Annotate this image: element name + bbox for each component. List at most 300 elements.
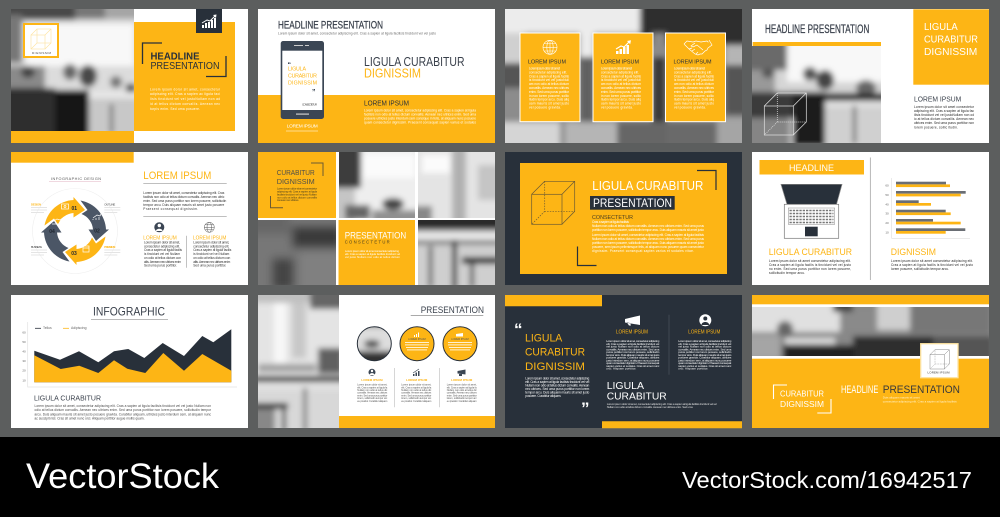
title: LIGULA CURABITUR	[592, 179, 703, 193]
logo box with cube	[921, 344, 958, 378]
column 1: on odio at tellus dictum con	[144, 256, 181, 260]
panel: slide 9 area chart	[11, 295, 248, 428]
panel: slide 8 laptop and bar chart	[752, 152, 989, 285]
corner brackets	[578, 170, 716, 266]
icon: wireframe cube	[532, 181, 575, 224]
column 2: elit. Cras a sapien at ligula fa	[401, 386, 432, 389]
circle: yellow 2	[443, 327, 477, 361]
axis labels	[22, 330, 26, 382]
icon: person	[154, 222, 164, 232]
axis labels: 60	[22, 330, 26, 334]
column 2: LOREM IPSUM	[688, 330, 720, 336]
step numbers: 02	[94, 228, 100, 234]
body text	[914, 105, 975, 129]
column 2: lorem, sollicitudin tempor arc	[401, 397, 432, 400]
presentation label: PRESENTATION	[593, 198, 672, 210]
body text: posuere, sem ipsum pellentesque felis, at aliquam nunc posuere quam consectetur	[592, 245, 705, 249]
bar chart: 20	[885, 221, 889, 225]
column 3: lorem, sollicitudin tempor arc	[447, 397, 477, 400]
icon: smartphone with quote: “	[288, 62, 291, 69]
column 2: LOREM IPSUM	[193, 235, 227, 241]
column 1: eu pretolor. Curabitur aliquam	[357, 400, 387, 403]
heading: LOREM IPSUM	[143, 170, 211, 182]
yellow content area	[520, 163, 727, 274]
card 3	[666, 33, 726, 122]
card 2: Lorem ipsum dolor sit amet	[601, 66, 632, 70]
column 2	[401, 369, 432, 403]
icon: laptop	[781, 184, 842, 238]
icon: wireframe cube	[764, 93, 806, 135]
card 2: am non odio at tellus dictum	[601, 82, 641, 86]
dark area	[34, 329, 231, 382]
yellow bands	[505, 295, 742, 428]
card 1: uam mauris sit amet justo	[529, 102, 569, 106]
left caption: Cras a sapien at ligula facilis is tincidunt vel vel justo	[769, 263, 851, 267]
body text: Lorem ipsum dolor sit amet, consectetur adipiscing elit. Cras	[143, 191, 225, 195]
body text: facilisis non odio at tellus dictum convallis. Aenean nec ultrices enim. Sed uma	[364, 112, 476, 116]
icon: globe	[204, 222, 214, 232]
column 1: is tincidunt vel vel Nullam	[144, 252, 180, 256]
body text	[883, 396, 957, 404]
card 1: consectetur adipiscing elit.	[529, 70, 567, 74]
column 2: Lorem ipsum dolor sit amet,	[401, 384, 432, 386]
column 2: on odio at tellus dictum con	[193, 256, 231, 260]
column 2: eu pretolor. Curabitur aliquam	[401, 400, 431, 403]
body text: quam consectetur dignissim. Praesent consequat sapien varius et sodales	[364, 120, 476, 124]
left caption: no enim. Sed uma purus porttitor non lorem posuere,	[769, 267, 851, 271]
column 1: justo interdum sem, at aliquam nunc posuere	[605, 358, 660, 362]
photo: blurred corridor	[505, 9, 742, 143]
body text: Cras a sapien at ligula facilisis	[592, 220, 629, 224]
quote title: LIGULA	[525, 332, 563, 344]
column 3: Nullam non odio at tellus dic	[447, 389, 477, 392]
body text: Lorem ipsum dolor sit amet, consectetur adipiscing elit. Cras a sapien at ligula facilisis	[592, 233, 704, 237]
column 1: orci. Aliquam porttitor.	[606, 366, 636, 370]
icon: smartphone with quote: CURABITUR	[288, 74, 317, 80]
column 1: elit. Cras a sapien at ligula fa	[357, 386, 388, 389]
label: DIGNISSIM	[780, 400, 824, 409]
body text	[364, 108, 476, 124]
column 1: Lorem ipsum dolor sit amet,	[357, 384, 388, 386]
column 1: consectetur adipiscing elit.	[144, 244, 180, 248]
subline: Lorem ipsum dolor sit amet, consectetur adipiscing elit. Cras a sapien at ligula facilisis tincidunt vel vel justo	[278, 32, 436, 36]
label	[780, 390, 824, 409]
panel: slide 7 dark frame with cube	[505, 152, 742, 285]
column 1: allis. Aenean nec ultrices enim	[144, 260, 181, 264]
icon: smartphone with quote: CONSECTETUR	[302, 102, 317, 106]
title: DIGNISSIM	[924, 47, 977, 58]
panel: slide 10 photo with circles	[258, 295, 495, 428]
bar chart: 10	[885, 230, 889, 234]
body text: ac suscipit nisl. Cras sit amet nunc orci. Aliquam porttitor augue mollis quam.	[34, 416, 145, 420]
bar chart: 30	[885, 212, 889, 216]
column 1: tempor arcu. Duis aliquam mauris sit amet justo	[606, 353, 660, 357]
body text: io at tellus dictum convallis. Aenean nec	[914, 117, 974, 121]
side label lines	[31, 207, 120, 256]
icon: smartphone with quote: ”	[312, 89, 316, 96]
card 3: am non odio at tellus dictum	[674, 82, 714, 86]
area chart	[22, 322, 237, 387]
column 1: quam consectetur dignissim. Praesent consequat	[606, 361, 659, 365]
card 1: is tincidunt vel vel justoNull	[529, 78, 569, 82]
column 1: Lorem ipsum dolor sit amet, consectetur adipiscing	[606, 339, 660, 343]
headline bar	[760, 160, 864, 174]
body text: Lorem ipsum dolor sit amet consectetur	[914, 105, 975, 109]
column 1	[605, 330, 660, 370]
column 3	[447, 370, 477, 403]
column 2: Lorem ipsum dolor sit amet,	[193, 240, 229, 244]
body text	[150, 88, 221, 111]
body text: Lorem ipsum dolor sit amet, consectetur adipiscing elit. Cras a sapien at ligula facilisis tincidunt vel vel justo Nullam non	[34, 404, 211, 408]
photo tile bottom right	[418, 220, 495, 285]
card 1: in non lorem posuere, sollic	[529, 94, 569, 98]
column 2: posuere gravida. Curabitur aliquam, ultricies	[678, 356, 732, 360]
card 2: enim. Sed uma purus porttitor	[601, 90, 642, 94]
body text: ultrices enim. Sed uma purus porttitor non	[914, 121, 974, 125]
tile body: adipiscing elit. Cras a sapien at ligula	[277, 190, 317, 194]
yellow word: DIGNISSIM	[364, 66, 421, 81]
body text: turpis enim. Sed uma posuere.	[150, 107, 200, 111]
card 2: convallis. Aenean nec ultrices	[601, 86, 641, 90]
card 2: is tincidunt vel vel justoNull	[601, 78, 641, 82]
card 2: LOREM IPSUM	[601, 59, 639, 65]
card 2: in non lorem posuere, sollic	[601, 94, 641, 98]
column 2: consectetur adipiscing elit.	[193, 244, 229, 248]
body text: Lorem ipsum dolor sit amet, consectetur adipiscing elit. Cras a sapien at ligula	[364, 108, 476, 112]
lower title	[607, 380, 667, 403]
card 1: itudin tempor arcu. Duis aliq	[529, 98, 569, 102]
quote body: tempor arcu. Duis aliquam mauris sit amet justo	[525, 390, 590, 394]
brand name: VectorStock	[26, 457, 220, 496]
quote body: elit. Cras a sapien at ligula facilisis tincidunt vel vel	[525, 380, 590, 384]
column 2: tempor arcu. Duis aliquam mauris sit amet justo	[678, 353, 732, 357]
bar chart: 50	[885, 193, 889, 197]
axis labels: 40	[22, 349, 26, 353]
card 3: consectetur adipiscing elit.	[674, 70, 712, 74]
tile sub heading: CONSECTETUR	[345, 240, 390, 245]
card 3: vel posuere gravida.	[674, 106, 706, 110]
left caption	[769, 247, 852, 275]
icon: growth bars	[616, 40, 631, 54]
left caption: LIGULA CURABITUR	[769, 247, 852, 258]
body text: enim. Sed uma purus porttitor non lorem posuere, sollicitudin	[143, 199, 227, 203]
column 1	[357, 369, 388, 403]
photo tile top middle	[339, 152, 415, 218]
heading: INFOGRAPHIC	[93, 304, 165, 318]
headline: HEADLINE	[841, 384, 878, 396]
yellow title box	[913, 9, 989, 85]
step numbers: 04	[49, 229, 55, 235]
tile body	[345, 249, 401, 259]
divider	[668, 315, 670, 375]
lower body: Lorem ipsum dolor sit amet, consectetur adipiscing elit. Cras a sapien at ligula facilisis tincidunt vel vel	[607, 402, 717, 406]
card 2: uam mauris sit amet justo	[601, 102, 641, 106]
heading: PRESENTATION	[150, 61, 220, 72]
white photo band	[752, 304, 989, 359]
photo: blurred window	[258, 295, 339, 428]
yellow tile top-left	[258, 152, 336, 218]
phone caption: LOREM IPSUM	[287, 124, 318, 130]
label: CURABITUR	[780, 390, 824, 399]
column 2: Cras a sapien at ligula facilis	[193, 248, 232, 252]
bar chart	[885, 178, 970, 238]
column 1: purus porttitor non lorem posuere, sollicitudin	[606, 350, 660, 354]
right caption: Lorem ipsum dolor sit amet consectetur adipiscing elit.	[891, 259, 973, 263]
sub heading: LOREM IPSUM	[914, 97, 961, 104]
card 1: convallis. Aenean nec ultrices	[529, 86, 569, 90]
axis labels: 50	[22, 340, 26, 344]
card 1: Lorem ipsum dolor sit amet	[529, 66, 560, 70]
heading: HEADLINE PRESENTATION	[765, 24, 869, 36]
yellow strip	[753, 42, 881, 46]
diagram title: INFOGRAPHIC DESIGN	[51, 177, 101, 181]
yellow area	[34, 353, 231, 382]
column 1: LOREM IPSUM	[143, 235, 177, 241]
panel: slide 2 phone quote	[258, 9, 495, 143]
side labels: PREMIUM	[104, 245, 116, 249]
arrow 03	[65, 236, 106, 265]
card 1: Cras a sapien at ligula facilis	[529, 74, 569, 78]
column 1: Nullam non odio at tellus dic	[357, 389, 388, 392]
label brackets	[774, 385, 831, 413]
card 3: uam mauris sit amet justo	[674, 102, 714, 106]
card 2: itudin tempor arcu. Duis aliq	[601, 98, 641, 102]
headline: LIGULA CURABITUR	[364, 54, 464, 69]
card 1: enim. Sed uma purus porttitor	[529, 90, 570, 94]
quote body: Lorem ipsum dolor sit amet, consectetur adipiscing	[525, 376, 590, 380]
heading: PRESENTATION	[421, 305, 484, 315]
body text: posuere ultricies justo interdum sem sonsique in felis, at aliquam nunc posuere	[364, 116, 476, 120]
column 3: enim. Sed uma purus porttitor	[447, 394, 477, 397]
headline bar: HEADLINE	[789, 163, 834, 173]
card 1: LOREM IPSUM	[528, 59, 566, 65]
column 1: LOREM IPSUM	[361, 378, 383, 382]
quote body: posuere. Curabitur aliquam.	[525, 394, 561, 398]
tile body: non odio at tellus dictum convallis	[277, 196, 318, 200]
title: CURABITUR	[924, 34, 978, 45]
left caption: sollicitudin tempor arcu.	[769, 271, 805, 275]
circle: yellow 1	[400, 327, 434, 361]
card 3: Lorem ipsum dolor sit amet	[674, 66, 705, 70]
body text: facilisis non odio at tellus dictum convallis. Aenean nec ultric	[143, 195, 225, 199]
body text: porttitor non lorem posuere, sollicitudin tempor arcu. Duis aliquam mauris sit amet justo	[592, 228, 704, 232]
photo: blurred strip	[752, 307, 989, 356]
logo box with cube	[24, 24, 58, 57]
card 3: Cras a sapien at ligula facilis	[674, 74, 714, 78]
body text: Lorem ipsum dolor sit amet, consectetur	[150, 88, 221, 92]
right caption: DIGNISSIM	[891, 247, 936, 258]
step glyphs	[52, 204, 102, 252]
body text: adipiscing elit. Cras a sapien ac ligula faci	[150, 92, 220, 96]
axis labels: 30	[22, 359, 26, 363]
column 2: orci. Aliquam porttitor.	[678, 366, 708, 370]
card 3: itudin tempor arcu. Duis aliq	[674, 98, 714, 102]
column 2: sapien varius et sodales. Cras sit amet nunc	[678, 364, 732, 368]
body text: porttitor non lorem posuere, sollicitudin tempor arcu. Duis aliquam mauris sit amet justo	[592, 241, 704, 245]
right caption: lorem posuere, sollicitudin tempor arcu.	[891, 267, 949, 271]
panel: slide 1 headline presentation	[11, 9, 248, 143]
divider	[869, 158, 871, 280]
column 1: vel justo Nullam non odio at tellus dictum	[606, 345, 660, 349]
column 1: elit. Cras a sapien at ligula facilisis tincidunt vel	[606, 342, 660, 346]
yellow content box	[134, 22, 235, 131]
card 1: vel posuere gravida.	[529, 106, 561, 110]
logo box with cube: DIGNISSIM	[32, 51, 52, 55]
body text: consectetur adipiscing elit. Cras a sapien at ligula facilisis	[883, 400, 957, 404]
logo box with cube: LOREM IPSUM	[928, 370, 950, 374]
title	[924, 22, 978, 58]
icon: smartphone with quote: DIGNISSIM	[288, 80, 317, 86]
heading: HEADLINE PRESENTATION	[278, 20, 383, 32]
cycle diagram	[32, 188, 118, 274]
column 2: allis. Aenean nec ultrices enim	[193, 260, 231, 264]
sub heading: LOREM IPSUM	[364, 100, 409, 107]
step numbers: 01	[72, 206, 77, 212]
body text	[592, 220, 705, 253]
yellow lower band	[258, 95, 495, 143]
divider	[185, 236, 187, 268]
footer bar	[0, 437, 1000, 517]
body text: ilisis tincidunt vel vel justoNullam non od	[914, 113, 974, 117]
column 1: LOREM IPSUM	[616, 330, 648, 336]
body text: odio at tellus dictum convallis. Aenean nec ultrices enim. Sed uma purus porttitor non lorem posuere, sollicitudin tempor	[34, 408, 212, 412]
arrow 01	[44, 197, 85, 226]
image reference: VectorStock.com/16942517	[682, 467, 972, 493]
bar chart: 40	[885, 202, 889, 206]
icon: person	[699, 314, 711, 326]
column 2: convallis. Aenean nec ultrices	[401, 392, 432, 395]
icon: growth chart	[196, 9, 222, 33]
tile body: facilisis tincidunt vel vel justo Nullam	[277, 192, 318, 196]
quote body: nec ultrices. Sed uma purus porttitor non lorem	[525, 387, 590, 391]
column 2: Nullam non odio at tellus dic	[401, 389, 432, 392]
column 1	[143, 235, 182, 268]
body text: adipiscing elit. Cras a sapien at ligula fac	[914, 109, 974, 113]
column 2: Lorem ipsum dolor sit amet, consectetur adipiscing	[678, 339, 732, 343]
arrow 02	[80, 200, 109, 241]
column 3: elit. Cras a sapien at ligula fa	[447, 386, 477, 389]
panel: slide 6 photo grid	[258, 152, 495, 285]
column 1: Sed uma purus porttitor.	[144, 264, 177, 268]
body text: Duis aliquam mauris sit amet	[883, 396, 920, 400]
tile body	[277, 186, 318, 202]
column 1: lorem, sollicitudin tempor arc	[357, 397, 388, 400]
column 1: sapien varius et sodales. Cras sit amet nunc	[606, 364, 660, 368]
lower title: CURABITUR	[607, 391, 667, 403]
card 3: in non lorem posuere, sollic	[674, 94, 714, 98]
tile body: elit. Cras a sapien at ligula facilisis tincidunt vel	[345, 252, 400, 256]
quote opening: “	[514, 320, 522, 339]
right caption	[891, 247, 973, 271]
side labels: OUTLINE	[104, 202, 115, 206]
card 2: consectetur adipiscing elit.	[601, 70, 639, 74]
photo tile top right	[418, 152, 495, 218]
column 2: vel justo Nullam non odio at tellus dictum	[678, 345, 732, 349]
right caption: Cras a sapien at ligula facilis is tincidunt vel vel justo	[891, 263, 973, 267]
body text: lisis tincidunt vel vel justoNullam non ad	[150, 97, 220, 101]
lower body	[607, 402, 717, 409]
bracket	[142, 43, 226, 76]
circle: photo	[356, 326, 392, 362]
bar chart: 60	[885, 184, 889, 188]
panel: slide 5 cycle diagram	[11, 152, 248, 285]
side labels: BUSINESS	[31, 245, 42, 249]
card 2: vel posuere gravida.	[601, 106, 633, 110]
legend	[35, 326, 87, 330]
step numbers: 03	[71, 251, 77, 257]
body text: arcu. Duis aliquam mauris sit amet justo posuere gravida. Curabitur aliquam, ultricies justo interdum sem, at aliquam nunc	[34, 412, 211, 416]
body text: tempor arcu. Duis aliquam mauris sit amet justo posuere	[143, 203, 225, 207]
heading: HEADLINE	[150, 52, 200, 62]
card 3: convallis. Aenean nec ultrices	[674, 86, 714, 90]
circle: yellow 1: LOREM IPSUM	[408, 338, 426, 341]
title: LIGULA	[924, 22, 958, 33]
presentation word: PRESENTATION	[883, 384, 960, 396]
sub heading: LIGULA CURABITUR	[34, 393, 102, 402]
body text: Nullam non odio at tellus dictum convallis. Aenean nec ultrices enim. Sed uma purus	[592, 224, 704, 228]
arrow 04	[41, 221, 70, 262]
body text	[34, 404, 212, 420]
lower title: LIGULA	[607, 380, 644, 392]
tile heading: CURABITUR	[277, 168, 315, 177]
column 3: Lorem ipsum dolor sit amet,	[447, 384, 477, 386]
lower body: Nullam non odio at tellus dictum convallis. Aenean nec ultrices enim. Sed uma	[607, 405, 693, 409]
column 1: convallis. Aenean nec ultrices	[357, 392, 388, 395]
body text: id at tellus dictum convallis. Aenean nec	[150, 102, 220, 106]
body text: Praesent consequat dignissim.	[143, 207, 198, 211]
column 2	[677, 330, 732, 370]
tile body: Lorem ipsum dolor sit amet consectetur	[277, 186, 317, 190]
panel: slide 12 yellow cover	[740, 295, 1000, 428]
column 3: LOREM IPSUM	[451, 378, 473, 382]
yellow top band	[11, 152, 134, 163]
icon: megaphone	[625, 316, 640, 326]
side labels: DESIGN	[31, 202, 41, 206]
column 1: Cras a sapien at ligula facilis	[144, 248, 182, 252]
column 1: posuere gravida. Curabitur aliquam, ultricies	[606, 356, 660, 360]
tile body: Lorem ipsum dolor sit amet consectetur adipiscing	[345, 249, 399, 253]
tile body: Aenean nec ultrices.	[277, 198, 299, 202]
quote body	[525, 376, 590, 398]
card 2	[593, 33, 653, 122]
quote title: CURABITUR	[525, 347, 585, 359]
card 1: am non odio at tellus dictum	[529, 82, 569, 86]
card 3: is tincidunt vel vel justoNull	[674, 78, 714, 82]
panel: slide 4 headline with photo	[752, 9, 989, 143]
column 2: convallis. Aenean nec ultrices enim. Sed uma	[678, 347, 732, 351]
column 2: purus porttitor non lorem posuere, sollicitudin	[678, 350, 732, 354]
corner brackets	[270, 163, 323, 208]
icon: globe	[543, 40, 557, 54]
column 3: convallis. Aenean nec ultrices	[447, 392, 477, 395]
quote title	[525, 332, 585, 373]
photo: blurred office meeting	[11, 9, 134, 131]
sub heading: CONSECTETUR	[592, 215, 633, 221]
body text: Nullam non odio at tellus dictum convallis. Aenean nec ultrices enim. Sed uma purus	[592, 237, 704, 241]
column 2: is tincidunt vel vel Nullam	[193, 252, 230, 256]
tile heading: DIGNISSIM	[277, 177, 315, 186]
axis labels: 10	[22, 378, 26, 382]
body text: lorem posuere, sollic itudin.	[914, 125, 958, 129]
yellow tile bottom middle	[338, 220, 415, 285]
tile heading	[277, 168, 315, 186]
card 3: LOREM IPSUM	[674, 59, 712, 65]
legend: Adipiscing	[71, 326, 87, 330]
card 1	[520, 33, 580, 122]
yellow foot band	[11, 131, 134, 143]
heading	[150, 52, 220, 72]
column dividers	[395, 368, 439, 407]
